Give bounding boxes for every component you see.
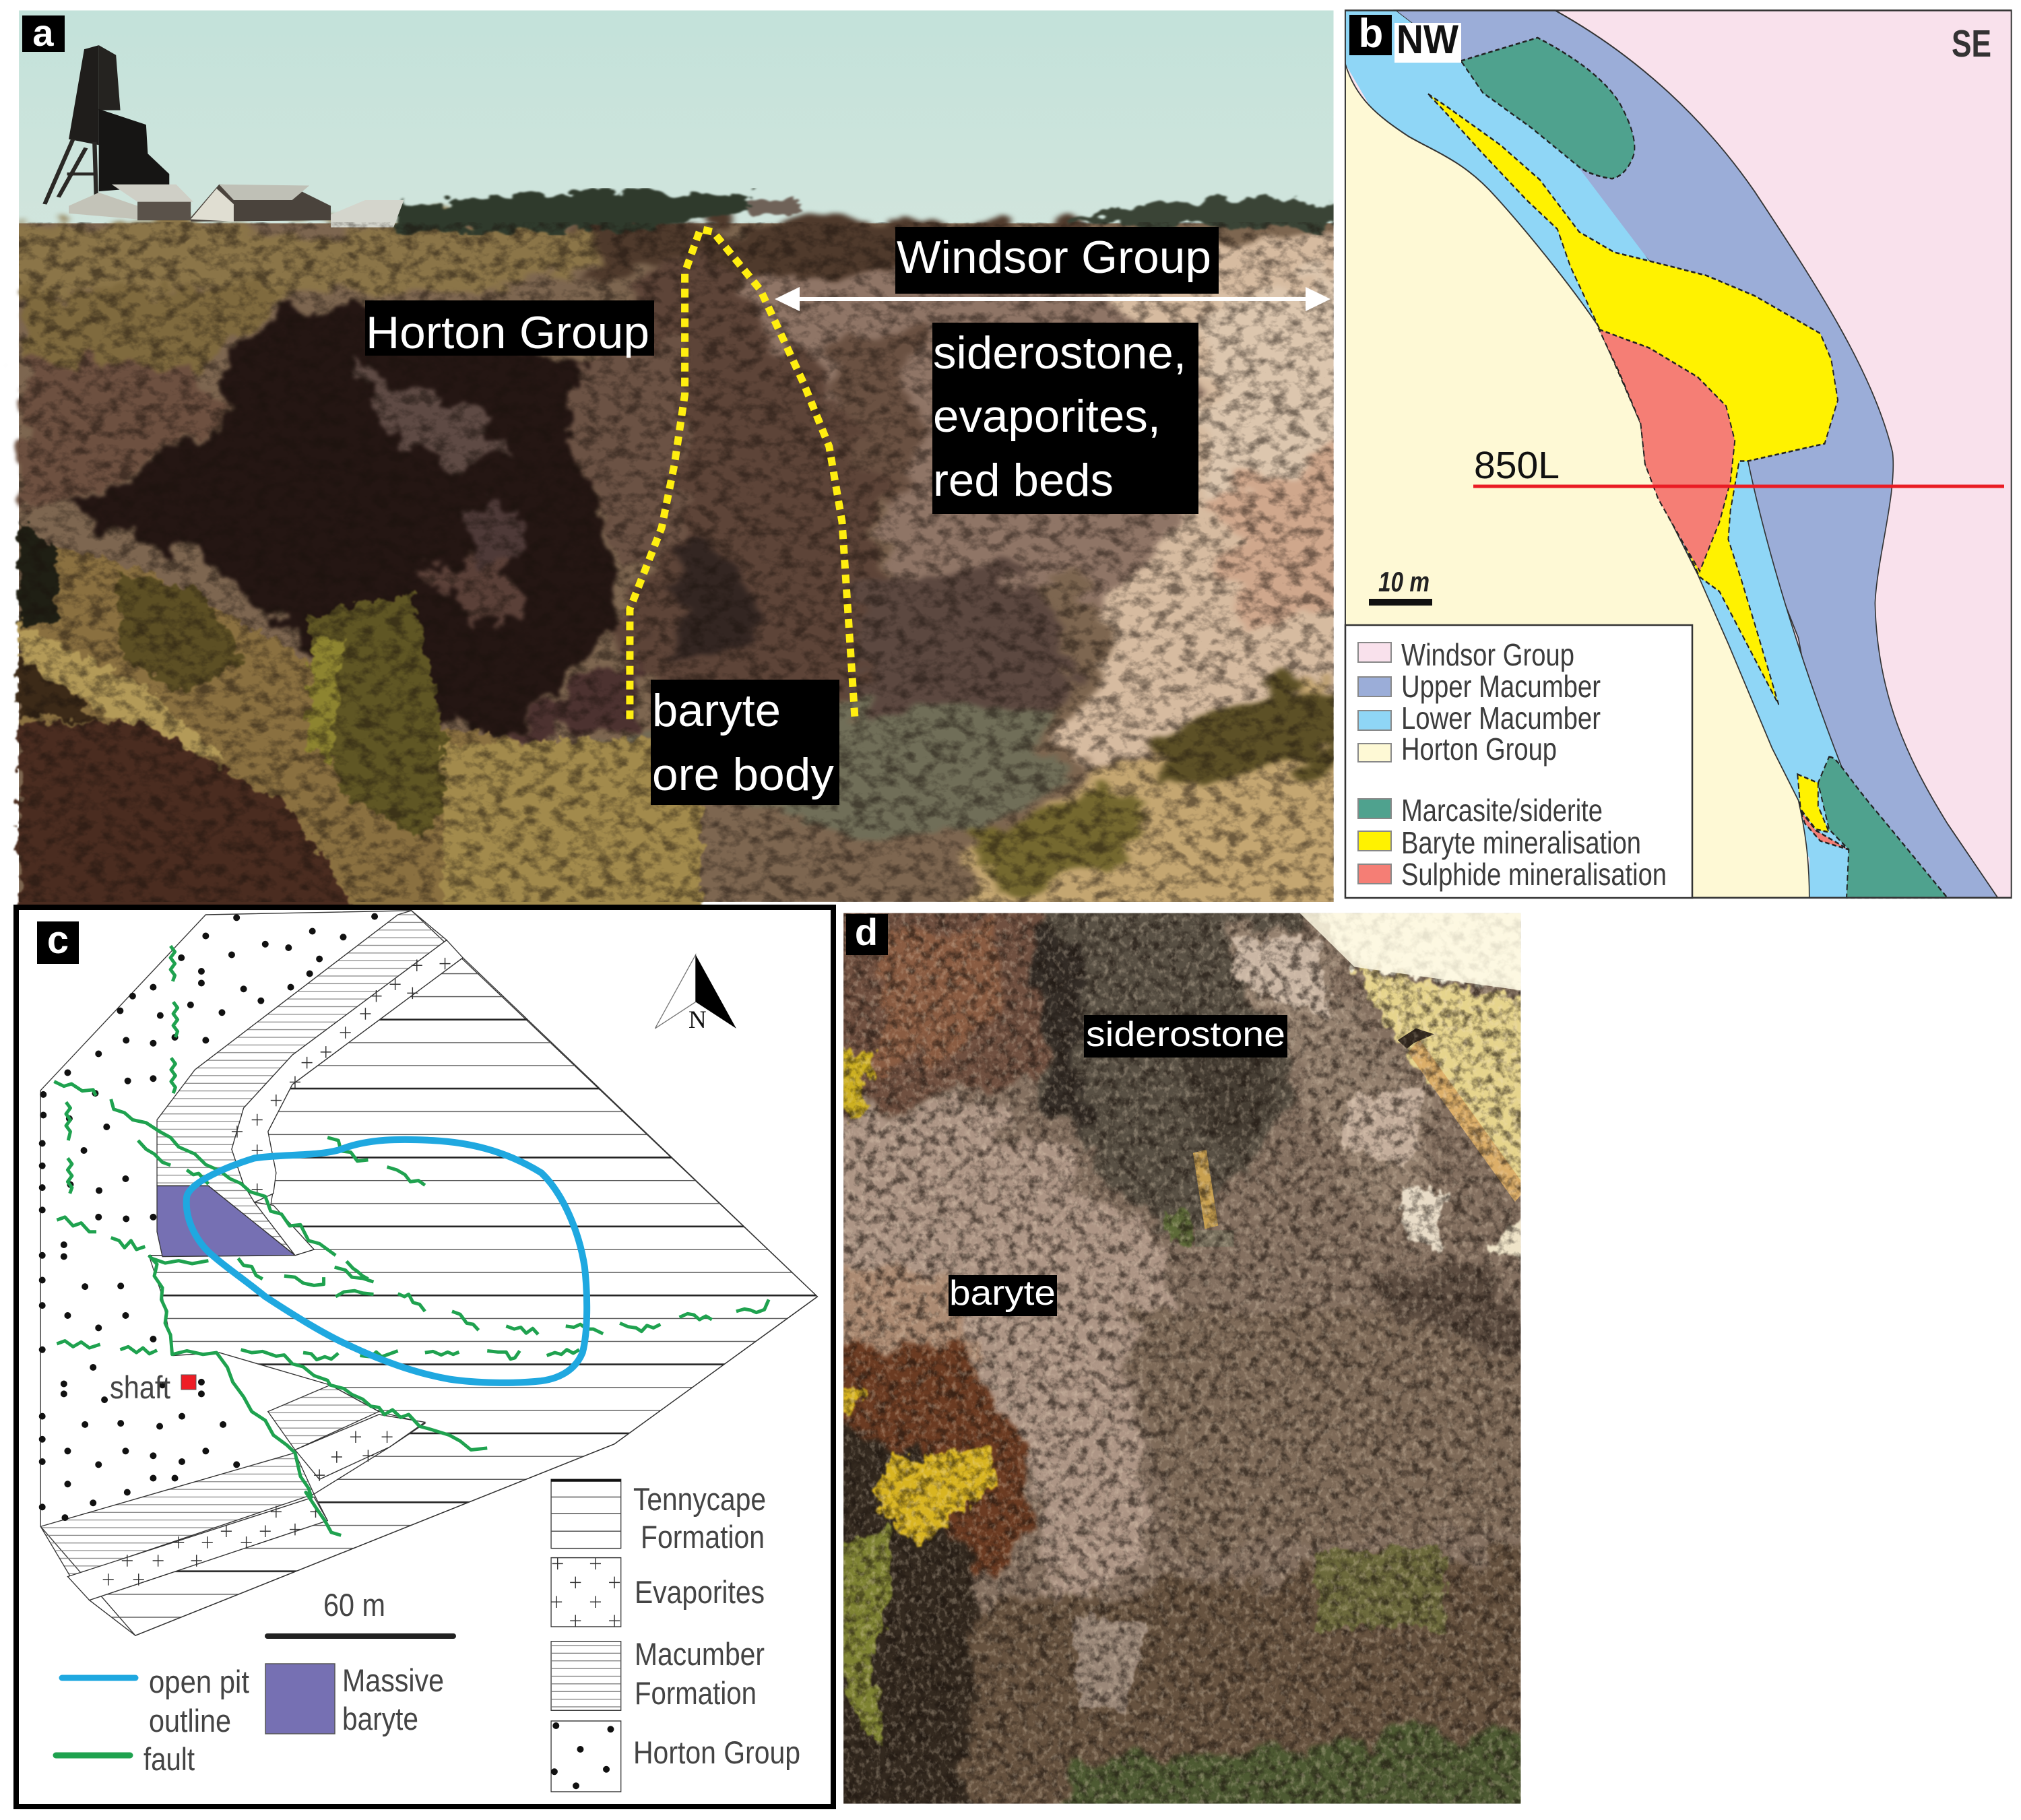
panel c: geological map (16, 907, 833, 1807)
north arrow (655, 955, 736, 1029)
label: baryte ore body (651, 680, 839, 805)
label: baryte ore body: ore body (652, 749, 834, 800)
legend text: formations: Formation (641, 1519, 765, 1555)
legend b: Upper Macumber (1401, 669, 1601, 704)
scale bar 10 m (1369, 566, 1432, 606)
arrow: Windsor Group extent (775, 287, 1330, 311)
label: siderostone, evaporites, red beds: evaporites, (933, 391, 1161, 442)
legend b: Lower Macumber (1401, 701, 1601, 736)
distant tree line (395, 191, 1334, 232)
hammers (1195, 1029, 1520, 1247)
label: Windsor Group: Windsor Group (897, 232, 1211, 283)
legend text: formations (633, 1481, 800, 1770)
label: baryte ore body: baryte (652, 685, 781, 736)
legend text: formations: Horton Group (633, 1734, 800, 1770)
badge b and NW label: NW (1397, 17, 1458, 62)
legend: massive baryte: Massive (342, 1662, 444, 1698)
badge d (846, 911, 888, 955)
Horton dots (42, 917, 375, 1518)
open pit outline (187, 1140, 587, 1383)
legend b: Marcasite/siderite (1401, 793, 1603, 828)
label badge a: a (32, 11, 54, 54)
badge d: d (855, 911, 878, 953)
Horton legend swatch (551, 1721, 621, 1792)
badge b and NW label (1349, 11, 1461, 63)
legend text: formations: Macumber (635, 1636, 765, 1672)
legend: massive baryte: baryte (342, 1701, 418, 1736)
badge c: c (47, 918, 69, 962)
dotted yellow ore body outline (630, 229, 855, 719)
Tennycape legend swatch (551, 1479, 621, 1549)
label: baryte: baryte (949, 1274, 1056, 1313)
badge c (37, 918, 79, 964)
legend: open pit outline: open pit (149, 1664, 249, 1699)
legend b: Windsor Group (1401, 637, 1574, 672)
legend: fault: fault (143, 1741, 195, 1777)
Macumber legend swatch (551, 1642, 621, 1710)
mine buildings (44, 45, 404, 228)
label badge a (22, 11, 65, 54)
legend: open pit outline: outline (149, 1703, 231, 1738)
legend: open pit outline (62, 1664, 249, 1738)
legend text: formations: Formation (635, 1675, 757, 1711)
map units (40, 911, 817, 1792)
SE label: SE (1952, 22, 1991, 65)
label: siderostone, evaporites, red beds (932, 323, 1198, 514)
panel border (16, 907, 833, 1807)
massive baryte body (157, 1185, 295, 1257)
photo grain a (19, 222, 1334, 902)
panel b: geological cross-section (1345, 10, 2012, 898)
legend b: Baryte mineralisation (1401, 825, 1641, 860)
label: Horton Group: Horton Group (366, 307, 649, 358)
cross-section units (1345, 10, 2012, 898)
scale bar 10 m: 10 m (1378, 566, 1430, 597)
label: siderostone, evaporites, red beds: siderostone, (933, 327, 1186, 379)
legend: massive baryte (265, 1662, 444, 1736)
badge b and NW label: b (1359, 11, 1383, 56)
Evaporites legend swatch (551, 1558, 621, 1627)
evaporite pluses (103, 958, 451, 1586)
legend b: Horton Group (1401, 732, 1557, 767)
label: siderostone, evaporites, red beds: red beds (933, 455, 1114, 506)
legend text: formations: Tennycape (633, 1481, 766, 1517)
legend text: formations: Evaporites (635, 1574, 765, 1610)
faults (54, 946, 769, 1535)
scale bar 60 m: 60 m (323, 1587, 385, 1623)
north letter: N (688, 1006, 707, 1034)
850L level line: 850L (1474, 444, 1560, 487)
legend b: Sulphide mineralisation (1401, 857, 1667, 892)
shaft marker: shaft (110, 1369, 170, 1405)
photo: pit lower-left detail (19, 285, 701, 917)
legend b (1345, 625, 1692, 898)
panel d: outcrop photograph (843, 913, 1521, 1804)
photo grain (843, 913, 1520, 1804)
label: siderostone: siderostone (1086, 1015, 1285, 1054)
photo: rock outcrop (843, 913, 1521, 1804)
photo: pit landscape (0, 10, 1375, 928)
panel a: open pit photograph (0, 10, 1375, 928)
